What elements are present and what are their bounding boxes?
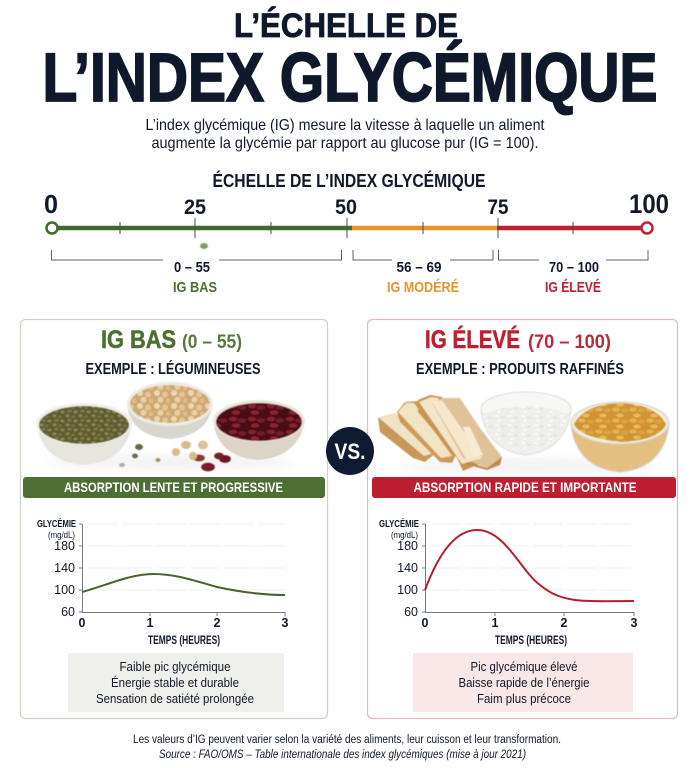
- benefits box: Énergie stable et durable: [111, 675, 239, 690]
- glycemic index scale: [44, 189, 669, 296]
- effects box: Baisse rapide de l’énergie: [458, 675, 590, 690]
- scale numbers: 100: [629, 189, 669, 219]
- absorption banner: ABSORPTION LENTE ET PROGRESSIVE: [64, 479, 283, 495]
- panel heading: [101, 326, 242, 354]
- footer note: Les valeurs d’IG peuvent varier selon la variété des aliments, leur cuisson et leur transformation.: [133, 734, 561, 746]
- example label: EXEMPLE : PRODUITS RAFFINÉS: [416, 359, 624, 378]
- curve: [82, 574, 285, 595]
- x axis values: 0: [422, 616, 429, 630]
- scale numbers: 50: [335, 196, 357, 219]
- panel heading: (70 – 100): [528, 332, 611, 353]
- y axis values: 140: [397, 561, 418, 575]
- rice bowl: [481, 392, 571, 455]
- range: high: [545, 259, 601, 296]
- y axis values: 100: [397, 583, 418, 597]
- x axis values: 1: [147, 616, 154, 630]
- range: moderate: [387, 259, 459, 296]
- panel heading: [425, 325, 611, 354]
- benefits box: Faible pic glycémique: [120, 659, 230, 674]
- y axis label: GLYCÉMIE: [379, 517, 419, 530]
- absorption banner: [23, 477, 325, 498]
- scale numbers: 0: [44, 189, 58, 219]
- y axis label: (mg/dL): [48, 530, 75, 540]
- benefits box: [68, 653, 284, 712]
- VS badge: VS.: [334, 439, 366, 464]
- chickpea bowl: [127, 382, 213, 439]
- y axis values: 180: [54, 539, 75, 553]
- cereal bowl: [571, 402, 669, 472]
- scale numbers: 75: [488, 196, 509, 219]
- y axis values: 180: [397, 539, 418, 553]
- chart: low GI glucose curve: [37, 517, 289, 647]
- y axis label: [379, 517, 419, 540]
- scale numbers: 25: [184, 196, 206, 219]
- range: low: IG BAS: [173, 279, 217, 296]
- range: high: 70 – 100: [549, 259, 599, 276]
- y axis label: (mg/dL): [391, 530, 418, 540]
- x axis values: 2: [214, 616, 221, 630]
- food photo: refined products: [378, 392, 669, 473]
- y axis values: 140: [54, 561, 75, 575]
- kidney bean bowl: [213, 400, 305, 460]
- panel heading: IG BAS: [101, 326, 176, 354]
- subtitle text: L’index glycémique (IG) mesure la vitesse à laquelle un aliment: [146, 117, 545, 134]
- y axis values: 60: [61, 605, 75, 619]
- absorption banner: [372, 477, 676, 498]
- example label: EXEMPLE : LÉGUMINEUSES: [86, 359, 261, 378]
- range: low: 0 – 55: [174, 259, 210, 276]
- x axis values: 3: [631, 616, 638, 630]
- benefits box: Sensation de satiété prolongée: [96, 691, 254, 706]
- panel: low GI: [20, 320, 328, 718]
- subtitle text: augmente la glycémie par rapport au glucose pur (IG = 100).: [152, 135, 538, 152]
- scale numbers: [44, 189, 669, 219]
- title: [42, 7, 658, 116]
- lentil bowl: [36, 403, 132, 465]
- y axis values: 60: [404, 605, 418, 619]
- VS badge: [326, 427, 374, 475]
- y axis values: [397, 539, 418, 619]
- sliced bread: [378, 395, 502, 471]
- panel heading: (0 – 55): [182, 332, 242, 353]
- panel: high GI: [368, 320, 678, 718]
- x axis values: [422, 616, 638, 630]
- x axis label: TEMPS (HEURES): [495, 635, 567, 647]
- range: moderate: 56 – 69: [396, 259, 442, 276]
- y axis values: [54, 539, 75, 619]
- x axis values: 0: [79, 616, 86, 630]
- range: high: IG ÉLEVÉ: [545, 279, 601, 296]
- x axis label: TEMPS (HEURES): [148, 635, 220, 647]
- y axis values: 100: [54, 583, 75, 597]
- effects box: [413, 653, 633, 712]
- absorption banner: ABSORPTION RAPIDE ET IMPORTANTE: [414, 479, 636, 495]
- scale bar: [46, 218, 652, 249]
- y axis label: GLYCÉMIE: [37, 517, 76, 530]
- x axis values: 1: [492, 616, 499, 630]
- scale heading: ÉCHELLE DE L’INDEX GLYCÉMIQUE: [212, 170, 486, 191]
- scattered beans: [119, 440, 231, 472]
- curve: [425, 530, 634, 601]
- x axis values: [79, 616, 289, 630]
- panel heading: IG ÉLEVÉ: [425, 325, 520, 354]
- footer note: [133, 734, 561, 761]
- scale brackets: [52, 250, 648, 260]
- x axis values: 3: [282, 616, 289, 630]
- chart: high GI glucose curve: [379, 517, 638, 647]
- x axis values: 2: [561, 616, 568, 630]
- footer note: Source : FAO/OMS – Table internationale des index glycémiques (mise à jour 2021): [159, 749, 526, 761]
- range: low: [173, 259, 217, 296]
- subtitle text: [146, 117, 545, 152]
- effects box: Faim plus précoce: [477, 691, 571, 706]
- effects box: Pic glycémique élevé: [470, 659, 578, 674]
- range: moderate: IG MODÉRÉ: [387, 279, 459, 296]
- title: L’ÉCHELLE DE: [234, 7, 458, 45]
- food photo: legumes: [36, 382, 305, 472]
- y axis label: [37, 517, 76, 540]
